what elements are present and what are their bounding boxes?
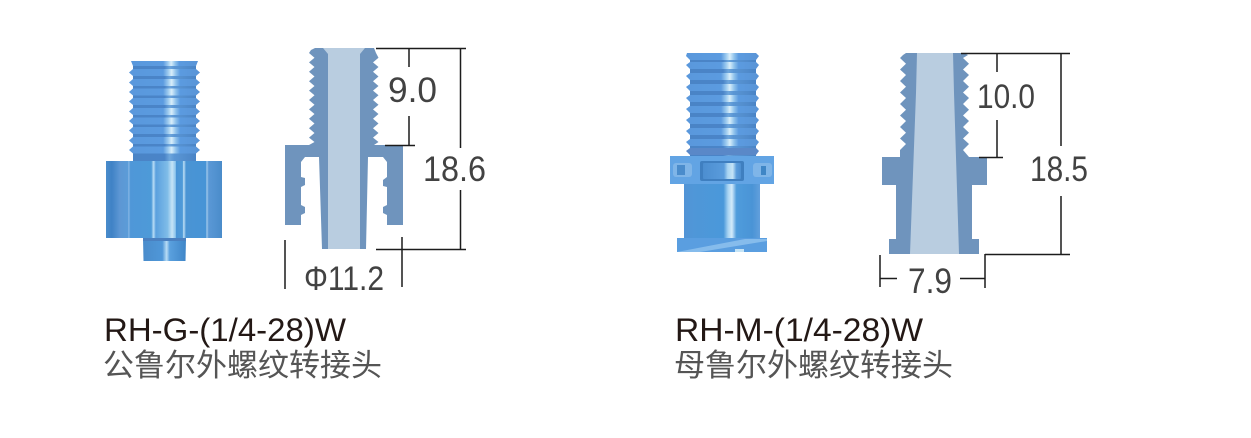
product photo: male luer adapter	[106, 61, 222, 261]
dimension: 9.0: 9.0	[388, 71, 437, 110]
product photo: female luer adapter	[670, 53, 774, 252]
model name: RH-G: RH-G-(1/4-28)W	[104, 312, 347, 348]
dimension lines: RH-G	[285, 48, 466, 289]
cross-section: RH-M	[882, 53, 987, 254]
dimension: 10.0: 10.0	[977, 78, 1035, 116]
dimension: 18.6: 18.6	[423, 150, 486, 189]
panel: RH-M product	[670, 53, 1088, 383]
panel: RH-G product	[103, 48, 486, 383]
cross-section: RH-G	[285, 48, 403, 249]
dimension lines: RH-M	[880, 53, 1070, 288]
model name: RH-M: RH-M-(1/4-28)W	[675, 312, 924, 348]
dimension: Φ11.2: Φ11.2	[304, 260, 384, 298]
dimension: 18.5: 18.5	[1030, 150, 1088, 189]
dimension: 7.9: 7.9	[908, 262, 952, 301]
description: female: 母鲁尔外螺纹转接头	[674, 348, 953, 383]
description: male: 公鲁尔外螺纹转接头	[103, 348, 382, 383]
